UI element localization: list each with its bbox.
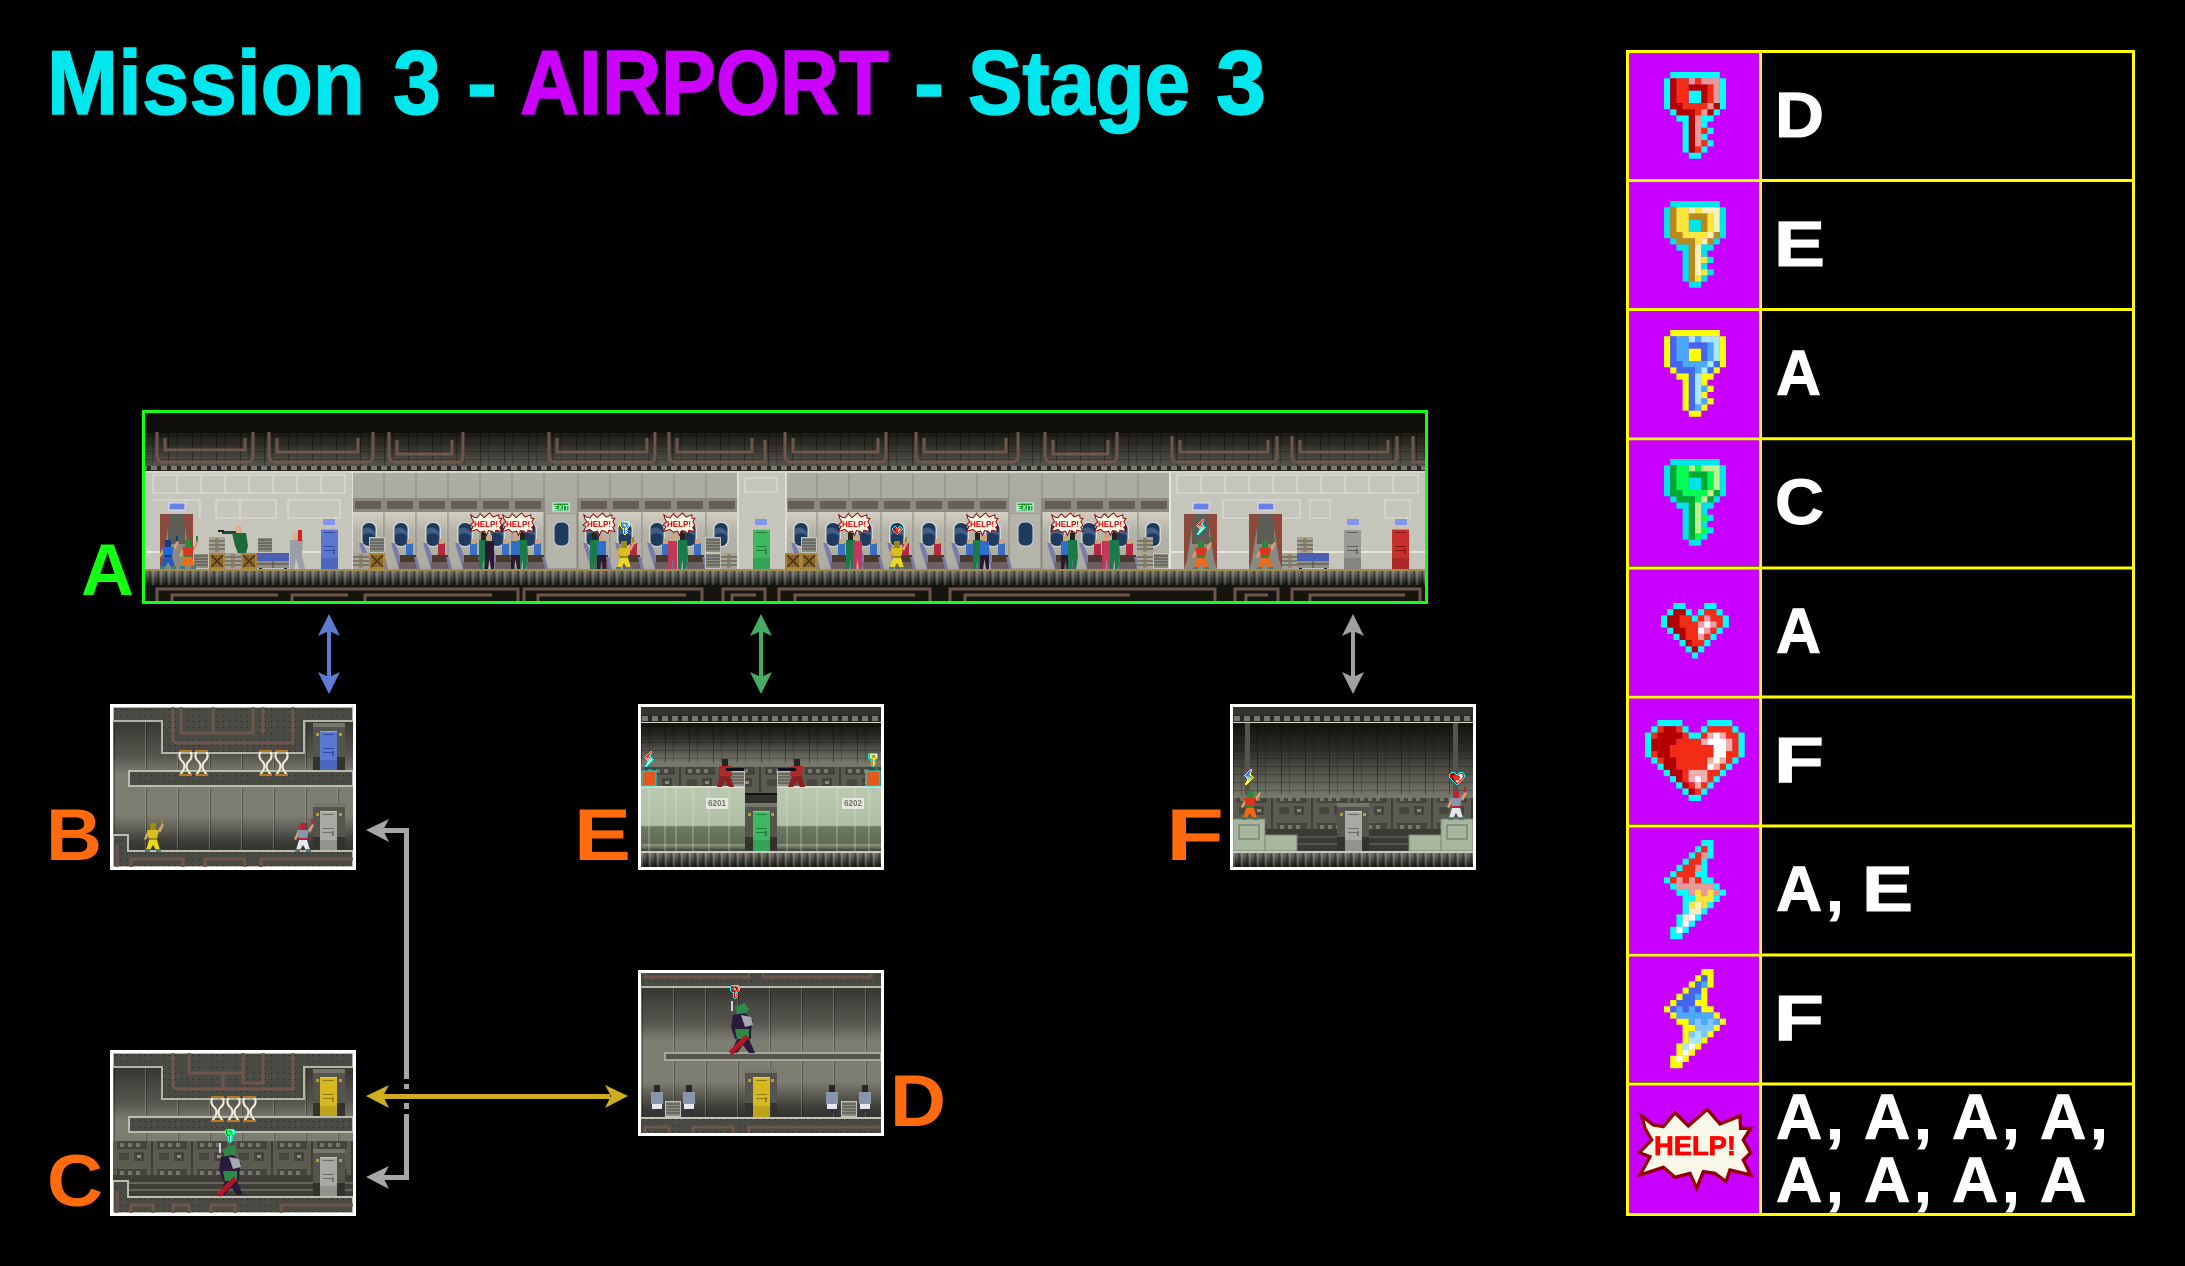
coloured doors xyxy=(321,519,1409,569)
icon: red key xyxy=(1664,72,1726,159)
floor and lower pipes xyxy=(145,569,1425,601)
enemies and player characters xyxy=(159,526,1276,570)
location: help hostages: , xyxy=(1914,1144,1932,1216)
location: help hostages: A xyxy=(1952,1144,1998,1216)
panel: room B xyxy=(112,706,354,868)
location: help hostages xyxy=(1776,1081,2108,1216)
wall plate 6202 xyxy=(842,798,864,809)
exit doors: EXIT xyxy=(1017,505,1034,512)
location: help hostages: , xyxy=(2090,1081,2108,1153)
location: help hostages: A xyxy=(1776,1081,1822,1153)
label C: C xyxy=(47,1141,103,1222)
pickups in cabin xyxy=(620,519,1206,535)
panel: room D xyxy=(640,972,882,1134)
seats xyxy=(359,539,1140,569)
help bubbles: HELP! xyxy=(667,519,691,529)
help bubbles: HELP! xyxy=(474,519,498,529)
location: red key: D xyxy=(1775,79,1824,151)
location: green key: C xyxy=(1775,466,1824,538)
icon: green key xyxy=(1664,459,1726,546)
panel: room F xyxy=(1232,706,1474,868)
title: 3 xyxy=(393,33,441,134)
exit doors xyxy=(545,503,1041,569)
help bubbles: HELP! xyxy=(842,519,866,529)
panel: collectibles table xyxy=(1628,52,2134,1216)
location: blue key: A xyxy=(1776,337,1821,409)
icon: red lightning xyxy=(1664,840,1726,939)
location: help hostages: , xyxy=(2002,1081,2020,1153)
location: red lightning: E xyxy=(1862,853,1913,925)
location: big heart: F xyxy=(1774,724,1824,796)
location: help hostages: A xyxy=(1864,1144,1910,1216)
location: help hostages: , xyxy=(2002,1144,2020,1216)
location: yellow key: E xyxy=(1774,208,1825,280)
location: help hostages: A xyxy=(1864,1081,1910,1153)
label B: B xyxy=(46,795,102,876)
location: help hostages: , xyxy=(1826,1144,1844,1216)
title: Mission xyxy=(47,33,365,134)
cargo stacks xyxy=(193,537,1329,569)
title xyxy=(47,33,1266,134)
title: AIRPORT xyxy=(520,33,889,134)
location: small heart: A xyxy=(1776,595,1821,667)
arrow: A to B (blue) xyxy=(318,614,340,694)
arrow: C to D (yellow) xyxy=(366,1085,628,1108)
cabin wall xyxy=(145,472,1425,569)
arrow: B to C (grey) xyxy=(366,819,409,1189)
location: help hostages: A xyxy=(2040,1081,2086,1153)
wall plate 6202: 6202 xyxy=(844,799,862,808)
icon: help bubble xyxy=(1639,1109,1751,1188)
label A: A xyxy=(81,530,134,611)
icon: yellow key xyxy=(1664,201,1726,288)
help bubbles xyxy=(470,513,1126,535)
icon: blue key xyxy=(1664,330,1726,417)
icon: blue lightning xyxy=(1664,969,1726,1068)
help bubbles: HELP! xyxy=(506,519,530,529)
icon: small heart xyxy=(1661,603,1729,659)
title: Stage xyxy=(968,33,1190,134)
location: help hostages: , xyxy=(1826,1081,1844,1153)
icon: big heart xyxy=(1645,720,1745,801)
panel: room C xyxy=(112,1052,354,1214)
help bubbles: HELP! xyxy=(1055,519,1079,529)
title: - xyxy=(467,33,497,134)
arrow: A to F (grey) xyxy=(1342,614,1364,694)
label D: D xyxy=(890,1061,946,1142)
help bubbles: HELP! xyxy=(1098,519,1122,529)
location: red lightning: , xyxy=(1826,853,1844,925)
ceiling and pipes xyxy=(145,413,1430,473)
location: help hostages: A xyxy=(2040,1144,2086,1216)
panel: room E xyxy=(640,706,882,868)
location: help hostages: A xyxy=(1952,1081,1998,1153)
location: red lightning xyxy=(1776,853,1913,925)
help bubbles: HELP! xyxy=(970,519,994,529)
arrow: A to E (green) xyxy=(750,614,772,694)
location: red lightning: A xyxy=(1776,853,1822,925)
magenta icon column xyxy=(1629,53,1759,1213)
wall plate 6201 xyxy=(706,798,728,809)
title: 3 xyxy=(1216,33,1266,134)
panel: room A (main cabin) xyxy=(144,412,1430,602)
exit doors: EXIT xyxy=(553,505,570,512)
help bubbles: HELP! xyxy=(587,519,611,529)
windows xyxy=(361,522,1161,547)
title: - xyxy=(914,33,944,134)
lavatory doorways xyxy=(160,503,1282,569)
location: help hostages: , xyxy=(1914,1081,1932,1153)
icon: help bubble: HELP! xyxy=(1654,1131,1736,1161)
label E: E xyxy=(574,795,631,876)
location: help hostages: A xyxy=(1776,1144,1822,1216)
label F: F xyxy=(1166,795,1224,876)
location: blue lightning: F xyxy=(1774,982,1824,1054)
wall plate 6201: 6201 xyxy=(708,799,726,808)
